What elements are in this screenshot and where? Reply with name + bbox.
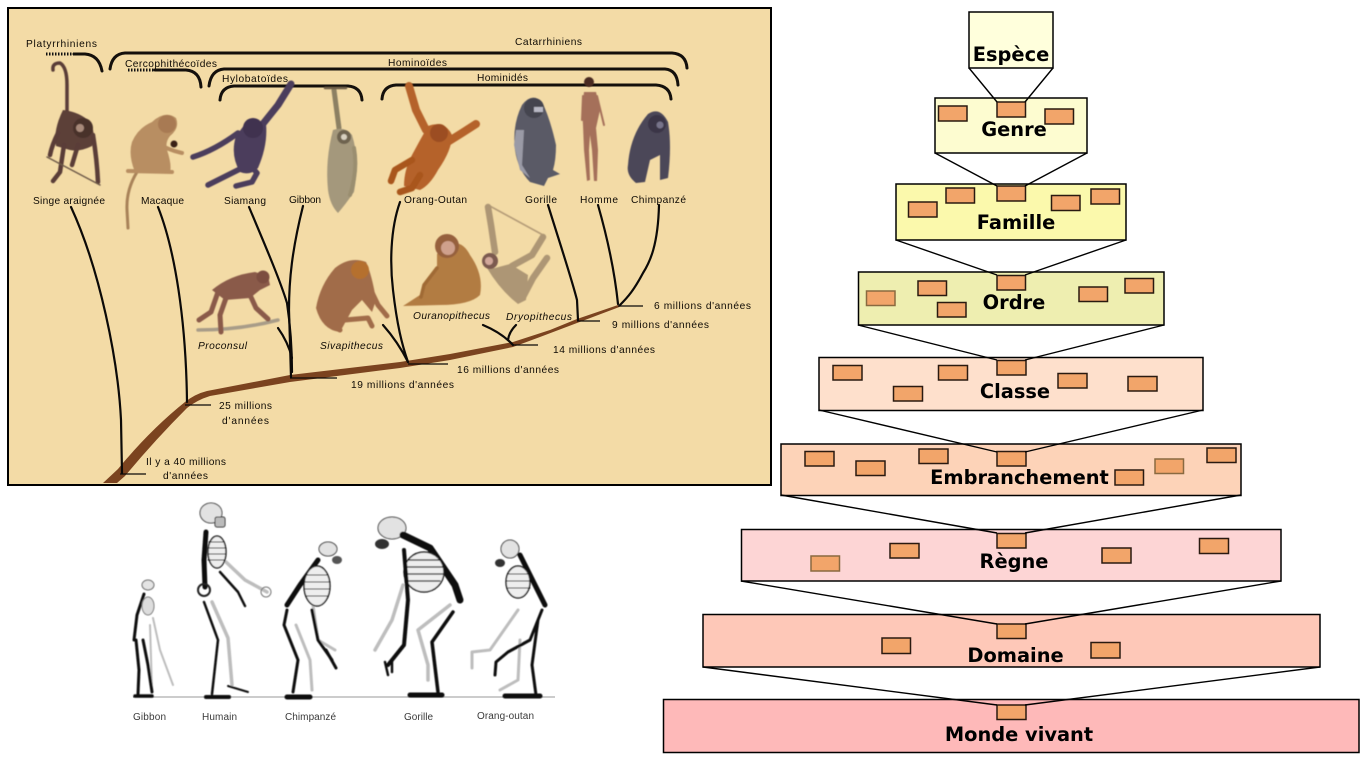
- icon: dryopithecus: [482, 205, 547, 304]
- icon: spider monkey: [47, 63, 100, 185]
- taxon brackets: [46, 53, 687, 100]
- level: Genre: Genre: [981, 118, 1047, 141]
- icon: gorilla: [514, 98, 560, 186]
- skeleton labels: Gorille: [404, 712, 433, 723]
- skeleton: gorilla: [375, 517, 460, 695]
- taxon labels: Hominoïdes: [388, 58, 447, 69]
- icon: siamang: [193, 84, 291, 186]
- taxon labels: Catarrhiniens: [515, 37, 582, 48]
- brown evolutionary trunk: [103, 305, 622, 483]
- connecting funnel lines: [703, 68, 1320, 705]
- level: Règne: [742, 530, 1281, 581]
- time labels: 16 millions d'années: [457, 365, 559, 376]
- taxon labels: [26, 37, 582, 85]
- level: Ordre: [858, 272, 1164, 325]
- level: Embranchement: Embranchement: [930, 466, 1109, 489]
- skeleton labels: [133, 711, 534, 723]
- species labels: Gibbon: [289, 195, 321, 206]
- level: Classe: Classe: [980, 380, 1050, 403]
- time ticks: [120, 306, 643, 474]
- species labels: Chimpanzé: [631, 195, 686, 206]
- panel: primate phylogeny: [8, 8, 771, 485]
- species labels: Siamang: [224, 196, 266, 207]
- skeleton: human: [198, 503, 271, 697]
- icon: ouranopithecus: [403, 234, 481, 306]
- icon: human: [582, 77, 604, 181]
- species labels: Homme: [580, 195, 618, 206]
- species labels: Proconsul: [198, 341, 248, 352]
- level: Classe: [819, 358, 1203, 410]
- level: Monde vivant: [664, 700, 1359, 752]
- skeleton labels: Gibbon: [133, 712, 166, 723]
- lineage branches: [71, 202, 659, 473]
- species labels: Gorille: [525, 195, 557, 206]
- skeleton labels: Humain: [202, 712, 237, 723]
- level: Domaine: [703, 614, 1320, 667]
- species labels: Sivapithecus: [320, 341, 383, 352]
- icon: gibbon: [325, 88, 357, 213]
- skeleton: gibbon: [134, 580, 173, 696]
- species labels: Macaque: [141, 196, 184, 207]
- taxon labels: Hominidés: [477, 73, 528, 84]
- species labels: Dryopithecus: [506, 312, 572, 323]
- level: Monde vivant: Monde vivant: [945, 723, 1093, 746]
- skeleton: chimpanzee: [284, 542, 342, 697]
- species labels: Singe araignée: [33, 196, 105, 207]
- level: Genre: [935, 98, 1087, 153]
- time labels: d'années: [222, 416, 269, 427]
- time labels: [146, 301, 751, 482]
- taxon labels: Hylobatoïdes: [222, 74, 288, 85]
- level: Règne: Règne: [980, 550, 1048, 573]
- time labels: 9 millions d'années: [612, 320, 709, 331]
- time labels: 19 millions d'années: [351, 380, 454, 391]
- species labels: Orang-Outan: [404, 195, 467, 206]
- level: Ordre: Ordre: [983, 291, 1045, 314]
- icon: sivapithecus: [316, 260, 387, 332]
- icon: orang-outan: [391, 86, 476, 192]
- species labels: [33, 195, 686, 352]
- skeleton: orang-outan: [472, 540, 545, 696]
- icon: chimpanzee: [628, 111, 670, 183]
- skeleton labels: Orang-outan: [477, 711, 534, 722]
- level: Espèce: Espèce: [973, 43, 1049, 66]
- time labels: 25 millions: [219, 401, 272, 412]
- time labels: d'années: [163, 471, 208, 482]
- level: Espèce: [969, 12, 1053, 68]
- level: Domaine: Domaine: [967, 644, 1064, 667]
- time labels: Il y a 40 millions: [146, 457, 226, 468]
- level: Famille: Famille: [977, 211, 1055, 234]
- chart: taxonomic funnel: [664, 12, 1359, 752]
- taxon labels: Platyrrhiniens: [26, 39, 97, 50]
- time labels: 6 millions d'années: [654, 301, 751, 312]
- icon: proconsul: [198, 270, 278, 332]
- panel: skeleton comparison: [133, 503, 555, 723]
- taxon labels: Cercophithécoïdes: [125, 59, 217, 70]
- time labels: 14 millions d'années: [553, 345, 655, 356]
- level: Embranchement: [781, 444, 1241, 496]
- species labels: Ouranopithecus: [413, 311, 490, 322]
- level: Famille: [896, 184, 1126, 240]
- icon: macaque: [127, 115, 182, 228]
- skeleton labels: Chimpanzé: [285, 712, 336, 723]
